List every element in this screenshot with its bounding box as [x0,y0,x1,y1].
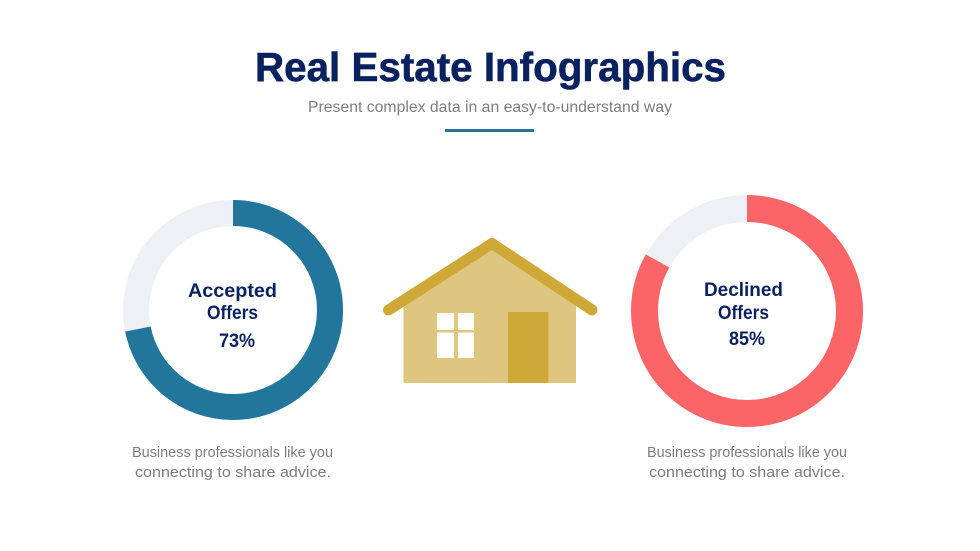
donut label: declined offers 85%: 85% [729,329,765,350]
house window [437,313,474,358]
house roof [388,244,592,310]
caption: accepted offers: Business professionals like you [132,444,333,461]
donut label: declined offers 85%: Declined [704,280,783,301]
subtitle: Present complex data in an easy-to-understand way [308,99,672,116]
panel: accepted offers [132,213,333,481]
title: Real Estate Infographics [255,44,726,90]
caption: accepted offers: connecting to share advice. [135,464,331,481]
house door [508,312,548,383]
donut label: accepted offers 73%: 73% [219,331,255,352]
caption: declined offers: Business professionals like you [647,444,847,461]
caption: accepted offers [132,444,333,481]
donut label: accepted offers 73%: Accepted [188,281,277,302]
house body [404,246,576,383]
donut chart: accepted 73% [136,213,330,407]
donut label: accepted offers 73% [188,281,277,352]
donut label: declined offers 85%: Offers [718,303,769,324]
caption: declined offers [647,444,847,481]
donut label: declined offers 85% [704,280,783,350]
title underline [445,129,534,132]
caption: declined offers: connecting to share advice. [649,464,845,481]
panel: declined offers [644,208,850,481]
donut chart: declined 85% [644,208,850,414]
icon: house [388,244,592,383]
donut label: accepted offers 73%: Offers [207,303,258,324]
